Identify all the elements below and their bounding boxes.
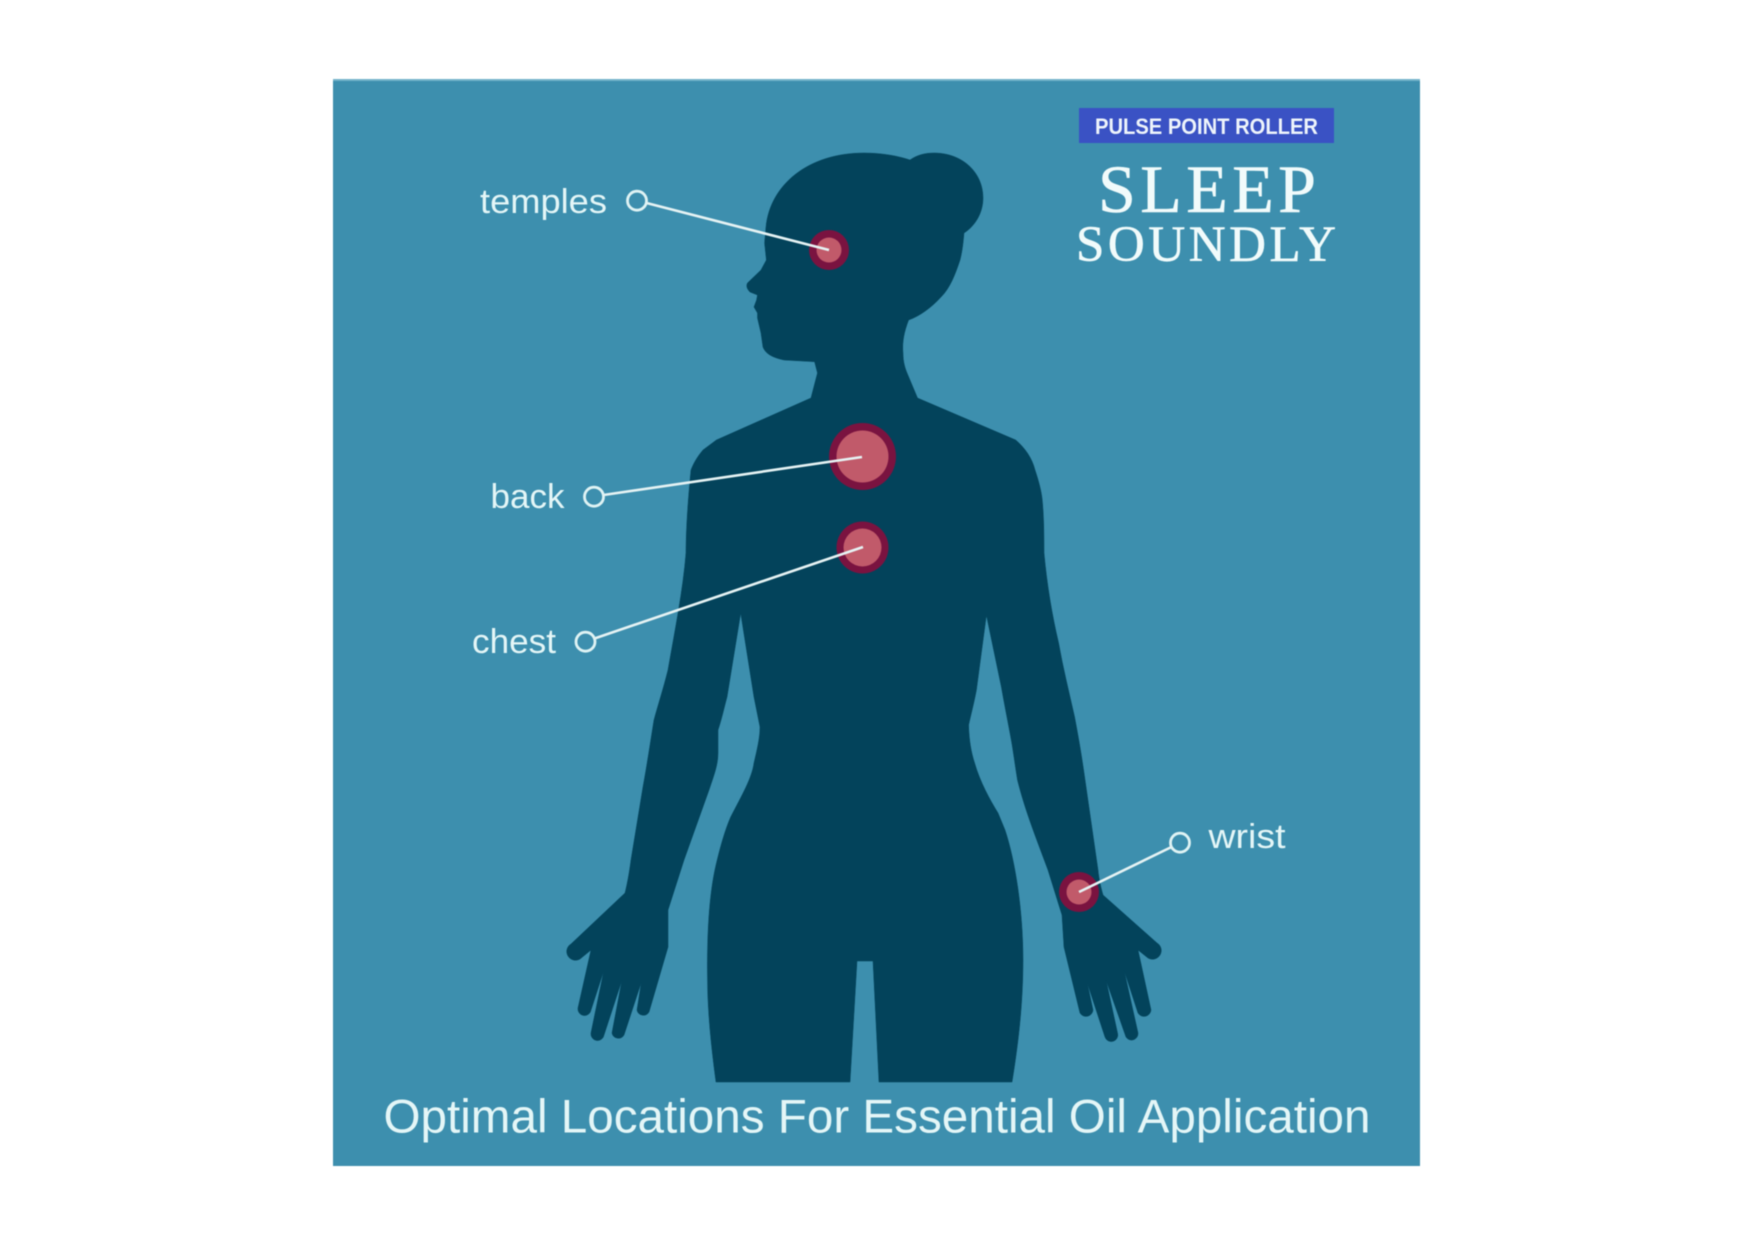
callout: wrist xyxy=(1059,818,1286,912)
callout: back: back xyxy=(490,478,566,516)
badge: pulse point roller: PULSE POINT ROLLER xyxy=(1095,114,1318,139)
callout: chest xyxy=(472,522,888,661)
caption: Optimal Locations For Essential Oil Application xyxy=(384,1090,1370,1142)
title: sleep soundly: SOUNDLY xyxy=(1076,217,1336,273)
badge: pulse point roller xyxy=(1079,108,1334,143)
panel: teal background xyxy=(333,79,1420,1166)
body silhouette xyxy=(567,153,1161,1082)
callout: wrist: wrist xyxy=(1207,818,1286,856)
callout: chest: chest xyxy=(472,623,557,661)
title: sleep soundly: SLEEP xyxy=(1098,151,1316,227)
callout: temples xyxy=(480,183,849,270)
callout: temples: temples xyxy=(480,183,607,221)
title: sleep soundly xyxy=(1076,151,1336,273)
callout: back xyxy=(490,423,896,516)
